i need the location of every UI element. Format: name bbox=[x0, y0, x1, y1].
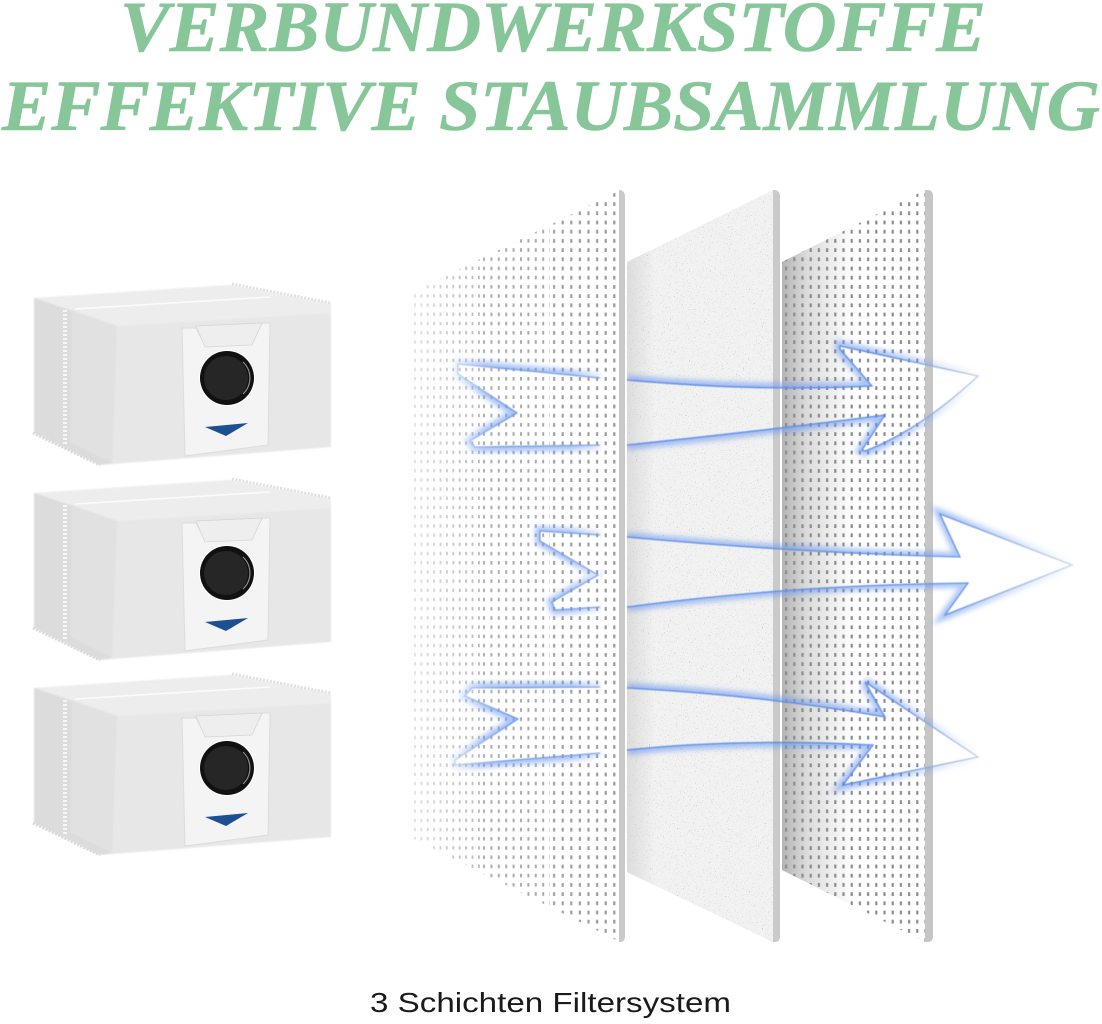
title bbox=[1, 0, 1100, 146]
filter layer 3: perforated rear sheet bbox=[782, 190, 933, 942]
product: top dust bag bbox=[33, 284, 331, 465]
airflow arrow: top bbox=[458, 346, 978, 451]
product: middle dust bag bbox=[33, 479, 331, 660]
airflow arrow: bottom bbox=[455, 682, 978, 785]
caption: 3 Schichten Filtersystem bbox=[370, 987, 731, 1018]
product: bottom dust bag bbox=[33, 674, 331, 855]
title: EFFEKTIVE STAUBSAMMLUNG bbox=[1, 66, 1100, 146]
filter layer 1: perforated front sheet bbox=[412, 190, 625, 942]
airflow arrow: middle bbox=[540, 514, 1072, 615]
filter layer 2: speckled middle sheet bbox=[627, 190, 780, 942]
